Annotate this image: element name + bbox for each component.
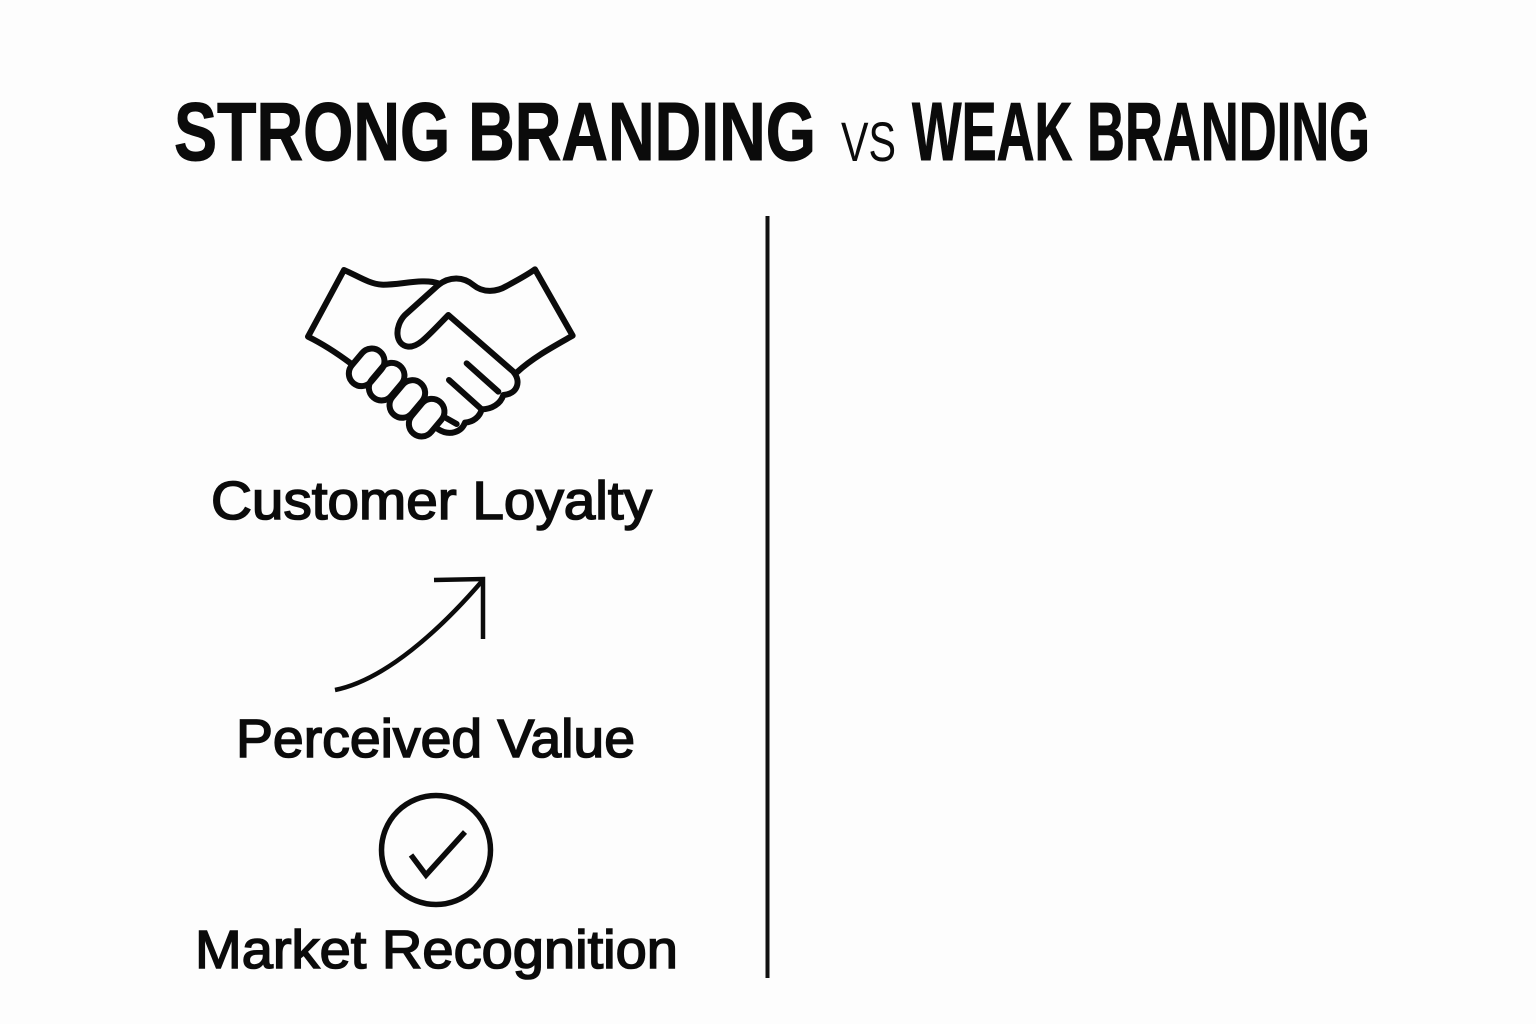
label: perceived value: Perceived Value: [236, 709, 635, 769]
heading: strong branding: STRONG BRANDING: [174, 85, 816, 178]
icon: handshake: [308, 269, 573, 442]
heading: vs: VS: [841, 110, 896, 173]
label: market recognition: Market Recognition: [195, 920, 678, 980]
icon: check circle: [382, 796, 490, 904]
label: customer loyalty: Customer Loyalty: [211, 471, 652, 531]
title: [174, 85, 1370, 178]
center divider: [766, 216, 770, 978]
icon: rising arrow: [335, 579, 483, 690]
